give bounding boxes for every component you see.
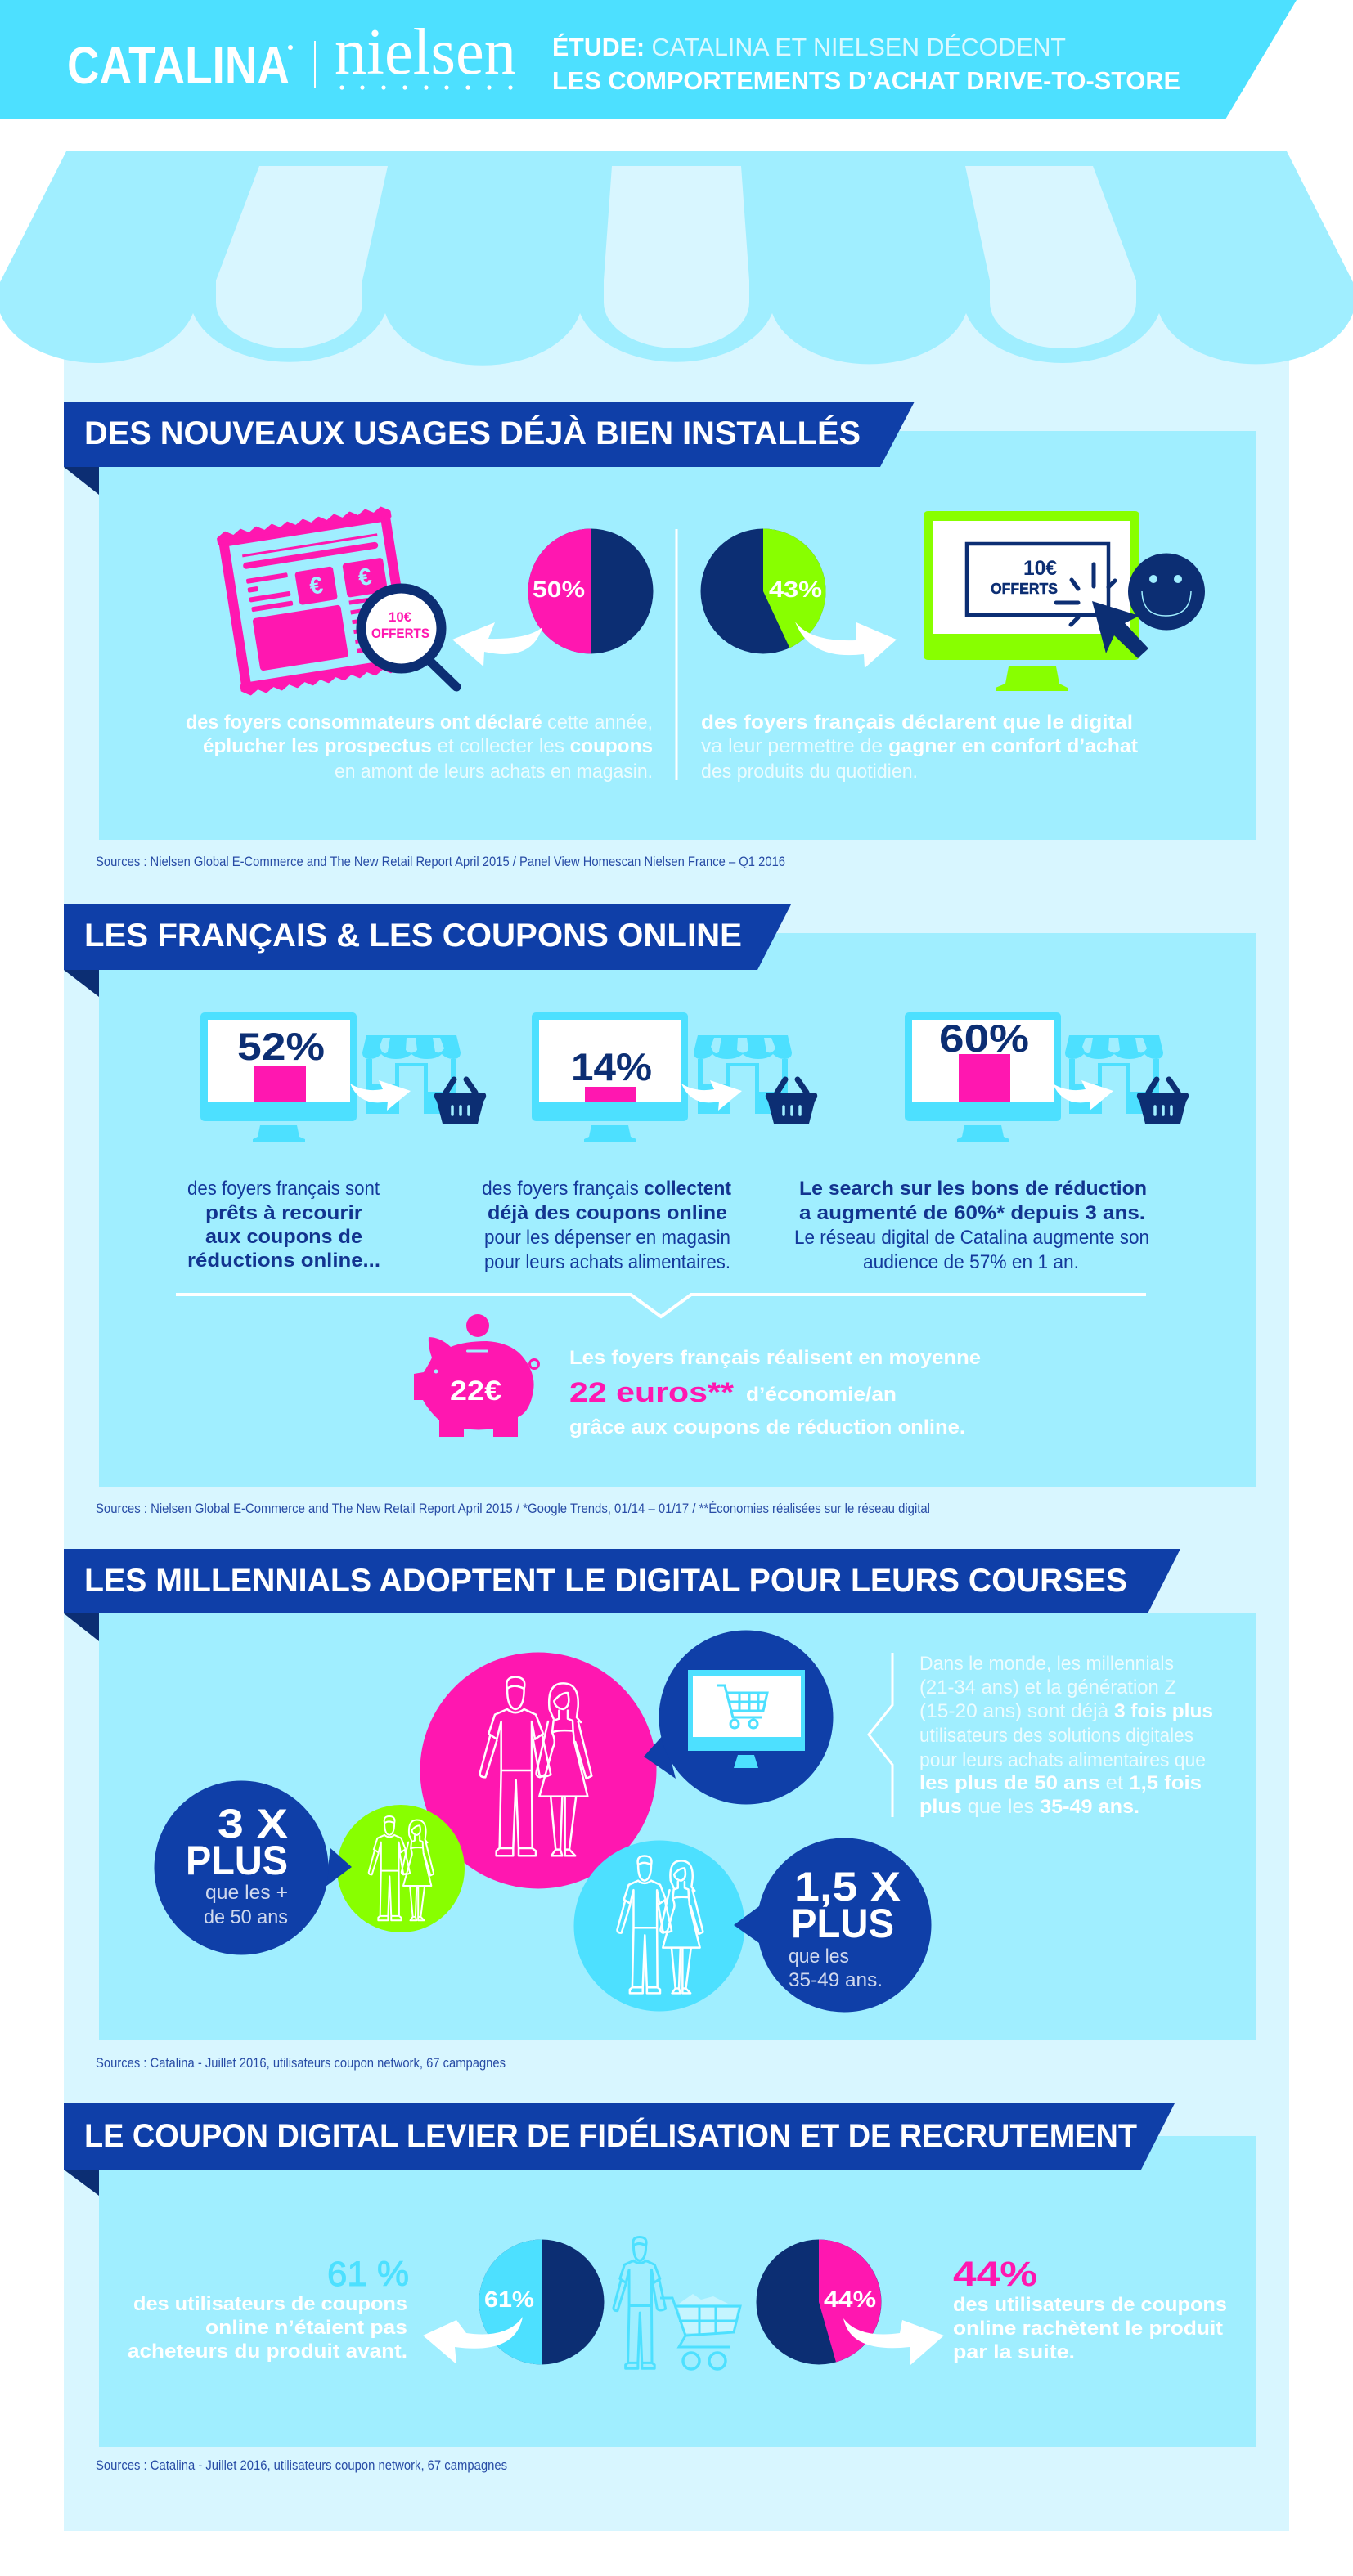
panel: millennials: [64, 1549, 1256, 2040]
logo divider: [314, 41, 316, 88]
section ribbon 2: [64, 904, 791, 997]
bubble: 1,5x plus: [734, 1838, 931, 2012]
text: 52%: [187, 1178, 380, 1272]
section ribbon 3: [64, 1549, 1180, 1641]
text: millennials explanation: (15-20 ans) sont déjà 3 fois plus: [919, 1700, 1213, 1722]
icon: piggy bank: 22€: [450, 1376, 501, 1407]
monitor: 14%: [532, 1012, 688, 1142]
text: 60%: a augmenté de 60%* depuis 3 ans.: [799, 1202, 1145, 1224]
icon: green monitor with coupon: OFFERTS: [991, 580, 1058, 597]
text: 52%: réductions online...: [187, 1250, 380, 1272]
arrow: to left text: [423, 2317, 523, 2364]
header title: ÉTUDE: CATALINA ET NIELSEN DÉCODENT: [552, 33, 1066, 61]
monitor: 52%: 52%: [237, 1025, 325, 1068]
text: 60%: audience de 57% en 1 an.: [863, 1251, 1079, 1273]
monitor: 14%: 14%: [571, 1045, 652, 1088]
logo: Catalina: CATALINA: [67, 36, 290, 95]
bubble: 3x plus: que les +: [205, 1882, 288, 1904]
bubble: 1,5x plus: que les: [789, 1945, 849, 1968]
text: 43%: [701, 711, 1138, 783]
icon: magnifier: 10€: [389, 609, 412, 625]
monitor: 60%: 60%: [939, 1016, 1029, 1060]
text: 50%: en amont de leurs achats en magasin.: [335, 761, 653, 783]
text: 61%: [128, 2255, 409, 2363]
pie: 61%: [479, 2239, 604, 2365]
icon: piggy bank: [414, 1314, 538, 1437]
icon: green monitor with coupon: 10€: [1023, 557, 1057, 580]
arrow: to coupon: [452, 622, 542, 666]
arrow: to monitor: [795, 622, 897, 668]
bubble: over 50 couple: [337, 1805, 465, 1932]
text: millennials explanation: (21-34 ans) et la génération Z: [919, 1676, 1176, 1699]
text: 14%: des foyers français collectent: [482, 1178, 731, 1200]
pie: 61%: 61%: [484, 2287, 534, 2312]
text: 61%: des utilisateurs de coupons: [133, 2293, 407, 2315]
pie: 50%: 50%: [533, 577, 585, 602]
text: millennials explanation: pour leurs achats alimentaires que: [919, 1749, 1206, 1771]
icon: magnifier: [357, 584, 456, 687]
section ribbon 4: LE COUPON DIGITAL LEVIER DE FIDÉLISATION ET DE RECRUTEMENT: [84, 2117, 1137, 2154]
text: millennials explanation: Dans le monde, les millennials: [919, 1653, 1174, 1675]
text: 44%: par la suite.: [953, 2341, 1075, 2363]
panel: coupon digital: [64, 2103, 1256, 2447]
notched white divider: [176, 1295, 1146, 1317]
text: 52%: aux coupons de: [205, 1226, 362, 1248]
section ribbon 1: [64, 402, 915, 495]
text: 50%: des foyers consommateurs ont déclaré cette année,: [186, 711, 653, 734]
bubble: millennials couple: [420, 1652, 656, 1889]
header title: [552, 33, 1180, 95]
bubble: 1,5x plus: PLUS: [791, 1901, 894, 1946]
bubble: online cart: [644, 1631, 833, 1804]
text: savings callout: d’économie/an: [746, 1384, 897, 1406]
text: 60%: Le réseau digital de Catalina augmente son: [794, 1227, 1149, 1249]
text: 14%: pour les dépenser en magasin: [484, 1227, 730, 1249]
header banner: [0, 0, 1297, 119]
text: savings callout: [569, 1347, 981, 1438]
source 4: Sources : Catalina - Juillet 2016, utilisateurs coupon network, 67 campagnes: [96, 2457, 507, 2473]
text: 52%: prêts à recourir: [205, 1202, 362, 1224]
text: 43%: va leur permettre de gagner en confort d’achat: [701, 735, 1138, 757]
icon: store and basket 1: [350, 1035, 486, 1124]
source 1: Sources : Nielsen Global E-Commerce and The New Retail Report April 2015 / Panel View Homescan Nielsen France – Q1 2016: [96, 854, 785, 869]
monitor: 60%: [905, 1012, 1061, 1142]
icon: coupon prospectus: €: [357, 563, 374, 591]
text: 61%: acheteurs du produit avant.: [128, 2340, 407, 2363]
bubble: 1,5x plus: 35-49 ans.: [789, 1969, 883, 1991]
pie: 43%: 43%: [769, 577, 822, 602]
bubble: 3x plus: de 50 ans: [204, 1906, 288, 1928]
icon: green monitor with coupon: [924, 511, 1139, 691]
section ribbon 2: LES FRANÇAIS & LES COUPONS ONLINE: [84, 918, 742, 954]
text: millennials explanation: les plus de 50 ans et 1,5 fois: [919, 1772, 1202, 1794]
text: 61%: 61 %: [327, 2255, 409, 2294]
header title: LES COMPORTEMENTS D’ACHAT DRIVE-TO-STORE: [552, 66, 1180, 95]
icon: shopper with cart: [614, 2237, 740, 2369]
bubble: 3x plus: [154, 1781, 352, 1954]
pie: 43%: [700, 528, 826, 654]
section ribbon 3: LES MILLENNIALS ADOPTENT LE DIGITAL POUR LEURS COURSES: [84, 1563, 1127, 1599]
awning: [0, 151, 1353, 366]
pie: 44%: 44%: [824, 2287, 876, 2312]
bubble: 35-49 couple: [574, 1840, 744, 2012]
text: savings callout: Les foyers français réalisent en moyenne: [569, 1347, 981, 1369]
icon: smiley: [1128, 553, 1205, 630]
panel: nouveaux usages: [64, 402, 1256, 840]
text: 44%: online rachètent le produit: [953, 2318, 1223, 2340]
pie: 44%: [756, 2239, 882, 2365]
icon: store and basket 3: [1053, 1035, 1189, 1124]
text: 43%: des produits du quotidien.: [701, 761, 918, 783]
icon: store and basket 2: [681, 1035, 817, 1124]
pie: 50%: [528, 528, 653, 654]
text: savings callout: grâce aux coupons de réduction online.: [569, 1416, 965, 1438]
bubble: 3x plus: PLUS: [186, 1838, 288, 1883]
section ribbon 1: DES NOUVEAUX USAGES DÉJÀ BIEN INSTALLÉS: [84, 415, 861, 451]
text: millennials explanation: utilisateurs des solutions digitales: [919, 1725, 1193, 1747]
text: millennials explanation: plus que les 35-49 ans.: [919, 1796, 1139, 1818]
icon: magnifier: OFFERTS: [371, 626, 429, 641]
text: 50%: [186, 711, 653, 783]
text: 43%: des foyers français déclarent que le digital: [701, 711, 1133, 734]
source 3: Sources : Catalina - Juillet 2016, utilisateurs coupon network, 67 campagnes: [96, 2055, 506, 2071]
monitor: 52%: [200, 1012, 357, 1142]
bubble: 1,5x plus: 1,5 X: [794, 1864, 901, 1910]
section ribbon 4: [64, 2103, 1175, 2196]
text: 61%: online n’étaient pas: [205, 2317, 407, 2339]
panel: coupons online: [64, 904, 1256, 1487]
icon: cursor: [1092, 601, 1148, 658]
bubble: 3x plus: 3 X: [218, 1801, 288, 1847]
text: 44%: [953, 2255, 1227, 2363]
bracket line: [869, 1653, 892, 1817]
text: 44%: 44%: [953, 2255, 1037, 2294]
text: 50%: éplucher les prospectus et collecter les coupons: [203, 735, 653, 757]
text: 52%: des foyers français sont: [187, 1178, 380, 1200]
text: 44%: des utilisateurs de coupons: [953, 2294, 1227, 2316]
arrow: to right text: [843, 2318, 944, 2365]
text: 14%: [482, 1178, 731, 1273]
logo: Nielsen: nielsen: [335, 16, 516, 88]
text: 14%: pour leurs achats alimentaires.: [484, 1251, 730, 1273]
text: millennials explanation: [919, 1653, 1213, 1818]
text: 60%: Le search sur les bons de réduction: [799, 1178, 1147, 1200]
icon: coupon prospectus: [218, 507, 414, 695]
text: 60%: [794, 1178, 1149, 1273]
source 2: Sources : Nielsen Global E-Commerce and The New Retail Report April 2015 / *Google Trends, 01/14 – 01/17 / **Économies réalisées sur le réseau digital: [96, 1501, 930, 1516]
text: savings callout: 22 euros**: [569, 1377, 735, 1408]
text: 14%: déjà des coupons online: [488, 1202, 727, 1224]
divider: [676, 529, 677, 780]
icon: coupon prospectus: €: [308, 572, 325, 600]
shop front background: [64, 286, 1289, 2531]
